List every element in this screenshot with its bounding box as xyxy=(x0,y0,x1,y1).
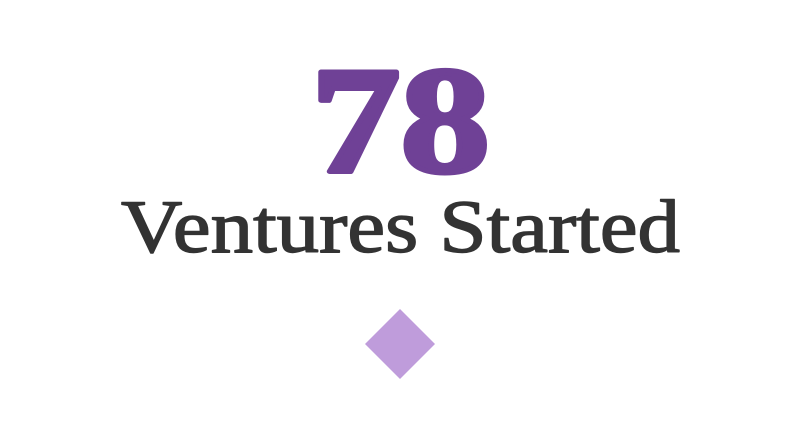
icon: diamond xyxy=(365,309,435,379)
heading: Ventures Started: Ventures Started xyxy=(121,186,680,269)
big number: 78: 78 xyxy=(311,36,490,204)
